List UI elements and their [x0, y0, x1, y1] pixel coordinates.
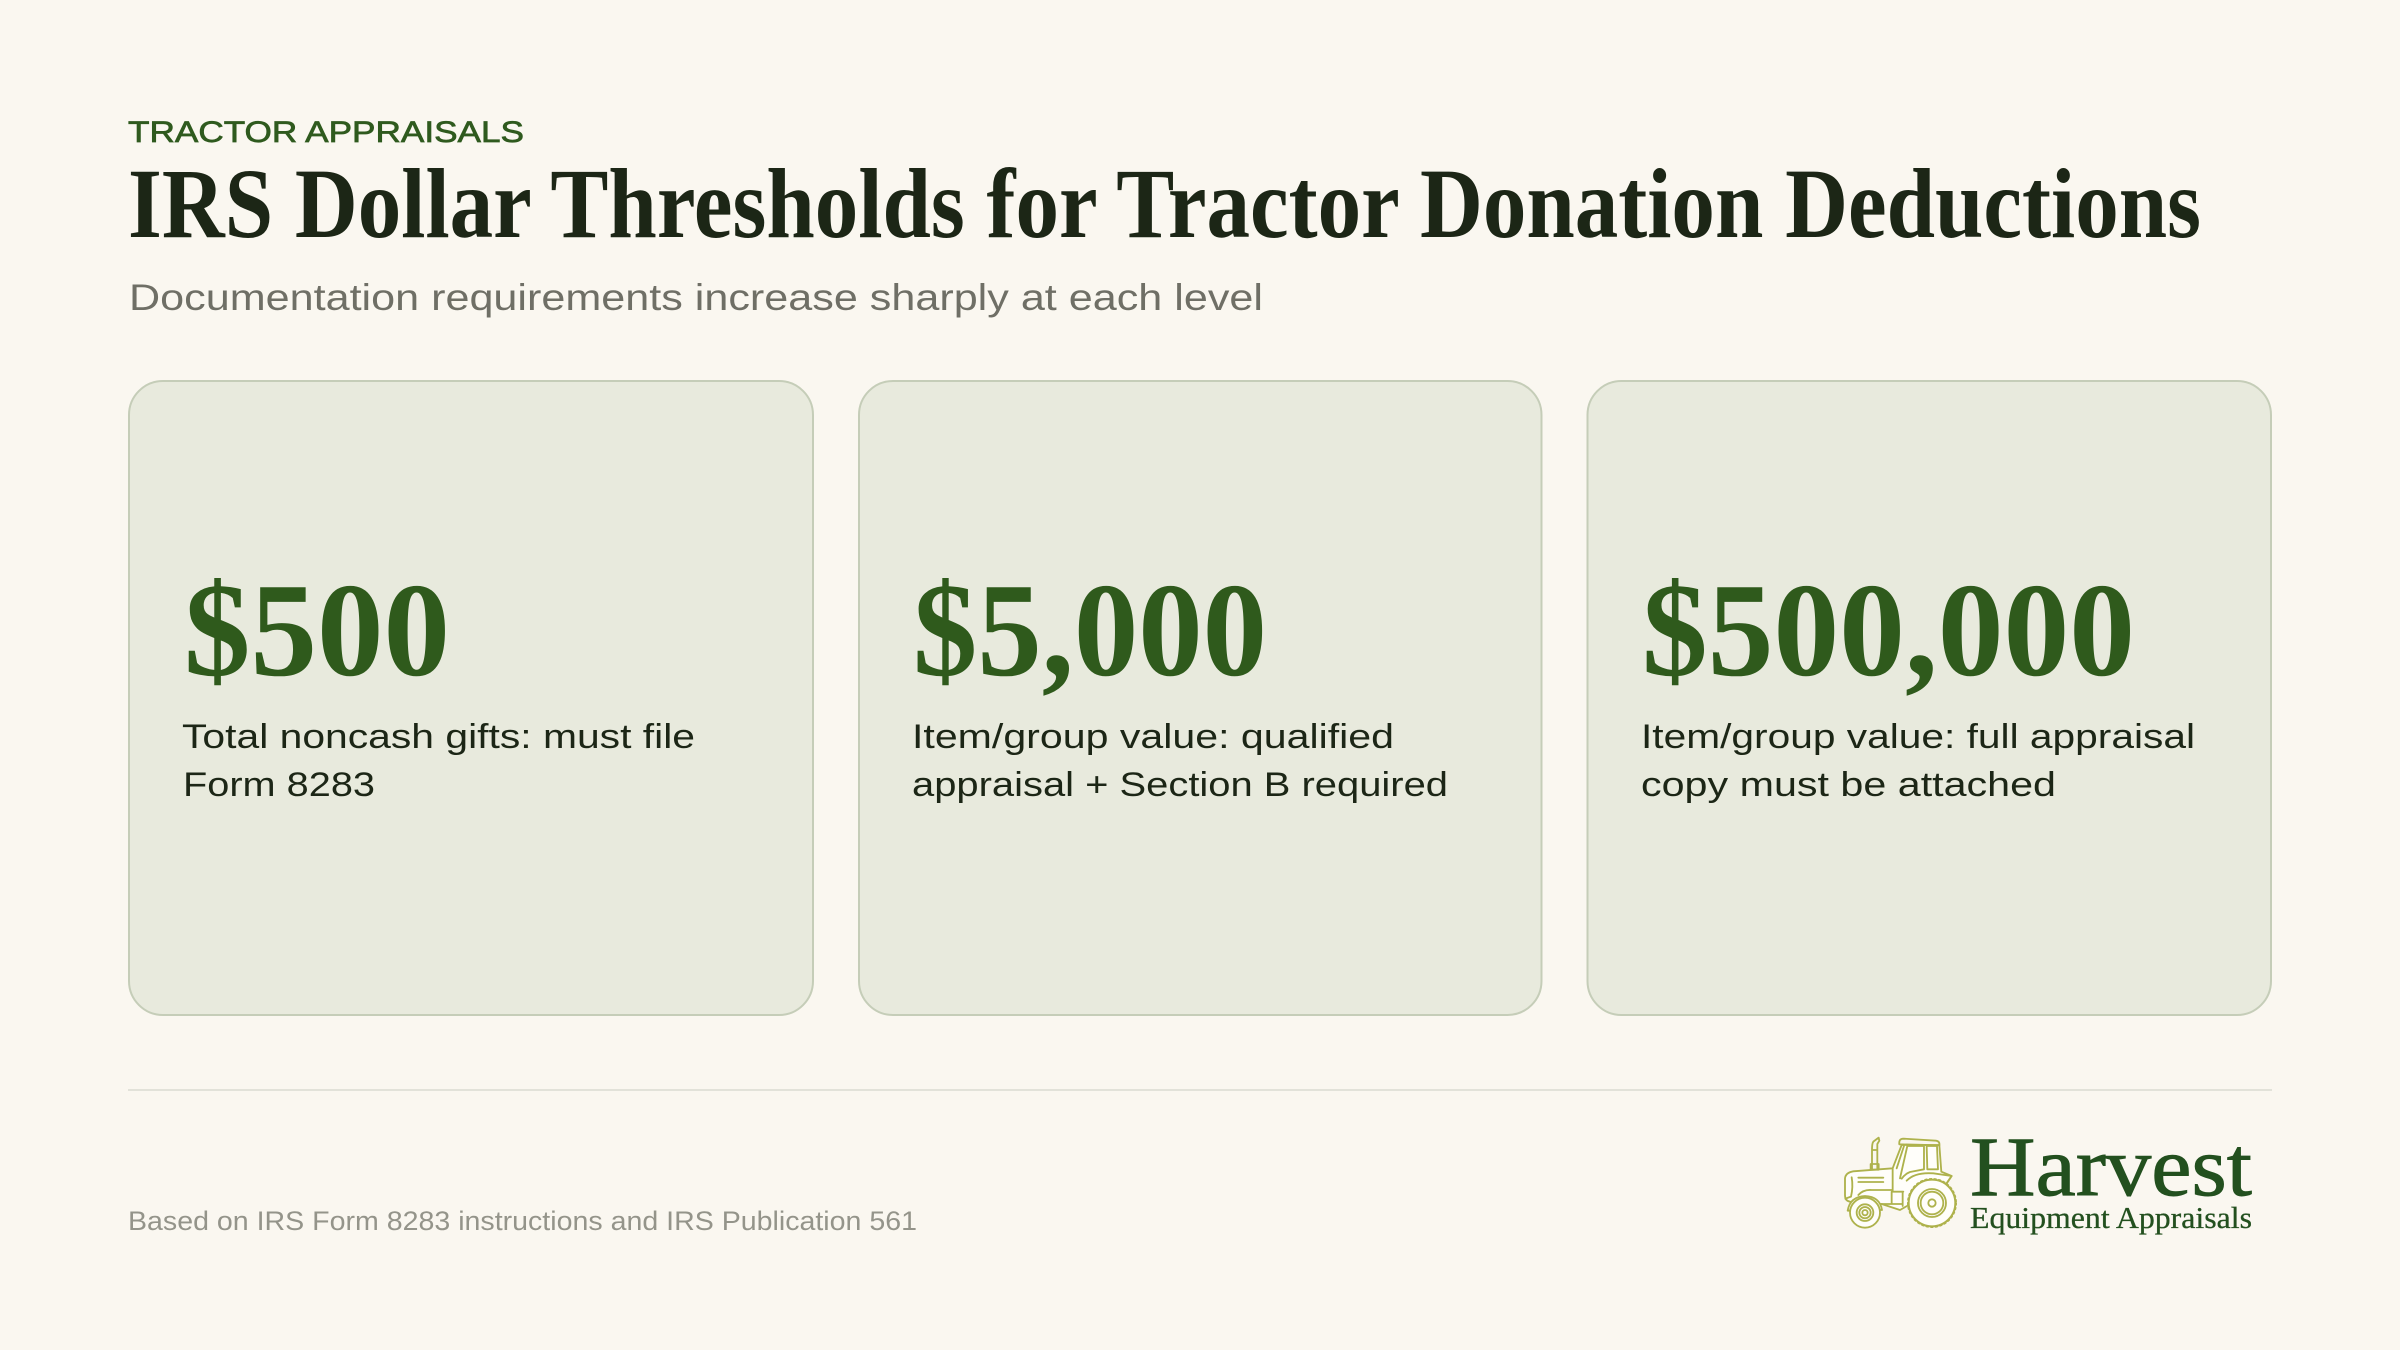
- panel: $5,000 threshold: [859, 381, 1542, 1015]
- description: $500,000: Item/group value: full appraisal: [1641, 718, 2195, 756]
- footer source note: Based on IRS Form 8283 instructions and IRS Publication 561: [128, 1206, 917, 1236]
- eyebrow: tractor appraisals: TRACTOR APPRAISALS: [128, 116, 524, 149]
- description: $500: [182, 718, 695, 804]
- description: $500,000: [1641, 718, 2195, 804]
- amount: $500: $500: [184, 556, 450, 704]
- logo wordmark: Harvest: [1970, 1120, 2252, 1214]
- icon: tractor: [1845, 1138, 1956, 1228]
- description: $500: Total noncash gifts: must file: [182, 718, 695, 756]
- panel: $500 threshold: [129, 381, 813, 1015]
- description: $500,000: copy must be attached: [1641, 766, 2056, 804]
- subtitle: Documentation requirements increase sharply at each level: [129, 277, 1263, 318]
- logo: Harvest Equipment Appraisals: [1845, 1120, 2252, 1235]
- amount: $500,000: $500,000: [1642, 556, 2135, 704]
- description: $500: Form 8283: [183, 766, 375, 804]
- amount: $5,000: $5,000: [913, 556, 1267, 704]
- description: $5,000: Item/group value: qualified: [912, 718, 1394, 756]
- logo wordmark: Equipment Appraisals: [1970, 1200, 2252, 1235]
- panel: $500,000 threshold: [1588, 381, 2271, 1015]
- description: $5,000: appraisal + Section B required: [912, 766, 1448, 804]
- description: $5,000: [912, 718, 1448, 804]
